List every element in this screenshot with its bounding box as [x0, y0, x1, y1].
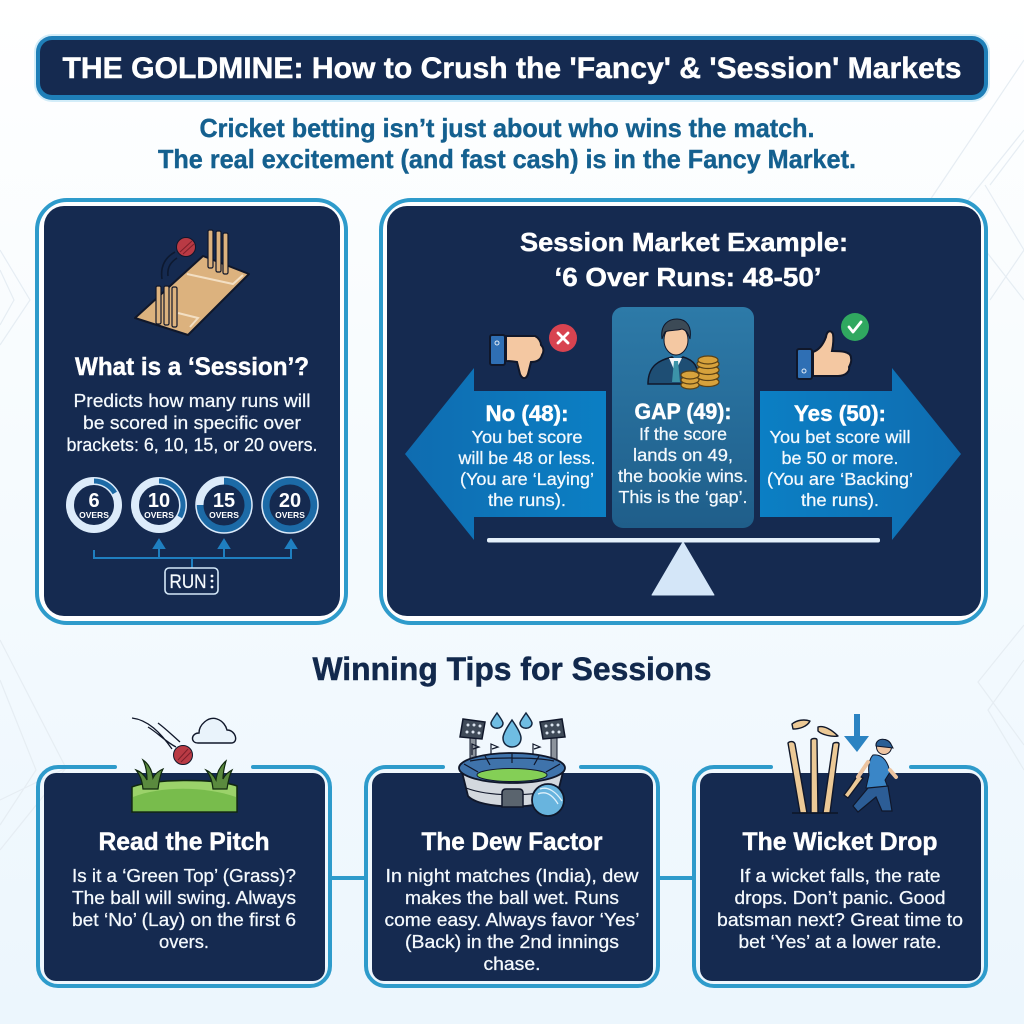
- over brackets rings: 15: [213, 490, 235, 512]
- heading: session market example: Session Market Example:: [520, 227, 848, 257]
- over brackets rings: [70, 477, 318, 533]
- text: gap 49: [618, 399, 748, 507]
- arrow: yes: [760, 368, 961, 540]
- subtitle: Cricket betting isn’t just about who wins the match.: [200, 113, 814, 143]
- over brackets rings: 10: [148, 490, 170, 512]
- heading: the dew factor: The Dew Factor: [422, 828, 603, 856]
- title banner: THE GOLDMINE: How to Crush the 'Fancy' & 'Session' Markets: [62, 52, 962, 85]
- heading: what is a session: What is a ‘Session’?: [75, 353, 309, 381]
- icon: ball on grass with cloud: [132, 718, 237, 812]
- run scoreboard label: [165, 568, 218, 594]
- text: read the pitch body: bet ‘No’ (Lay) on the first 6: [72, 910, 296, 930]
- text: no 48: will be 48 or less.: [457, 448, 596, 468]
- over brackets rings: OVERS: [144, 510, 174, 520]
- panel: session market example: [381, 200, 986, 623]
- subtitle: [158, 113, 856, 174]
- subtitle: The real excitement (and fast cash) is in the Fancy Market.: [158, 144, 856, 174]
- heading: session market example: ‘6 Over Runs: 48-50’: [554, 262, 822, 292]
- icon: broken wicket and batsman: [788, 714, 896, 813]
- over brackets rings: 20: [279, 490, 301, 512]
- heading: read the pitch: Read the Pitch: [98, 828, 270, 856]
- title banner: [34, 34, 990, 102]
- text: no 48: You bet score: [472, 427, 582, 447]
- run scoreboard label: RUN: [170, 572, 206, 593]
- text: the dew factor body: come easy. Always favor ‘Yes’: [384, 910, 640, 930]
- icon: thumbs down: [490, 324, 577, 378]
- balance beam and fulcrum: [487, 538, 880, 595]
- session description: Predicts how many runs will: [74, 390, 310, 411]
- text: gap 49: If the score: [639, 424, 727, 444]
- heading: winning tips: Winning Tips for Sessions: [312, 651, 712, 687]
- text: no 48: the runs).: [488, 490, 566, 510]
- text: the wicket drop body: If a wicket falls, the rate: [740, 866, 940, 886]
- text: no 48: No (48):: [486, 401, 568, 426]
- text: gap 49: This is the ‘gap’.: [618, 487, 748, 507]
- icon: stadium, dew drops and wet ball: [459, 713, 565, 816]
- text: yes 50: [767, 401, 913, 510]
- text: no 48: [457, 401, 596, 510]
- text: gap 49: the bookie wins.: [618, 466, 748, 486]
- gap card: [612, 307, 754, 528]
- icon: bookie with coins: [648, 319, 719, 389]
- text: gap 49: GAP (49):: [634, 399, 732, 424]
- text: yes 50: the runs).: [801, 490, 879, 510]
- text: the wicket drop body: bet ‘Yes’ at a lower rate.: [738, 932, 942, 952]
- icon: cricket pitch with wickets and ball: [135, 230, 249, 335]
- panel: the dew factor: [366, 713, 658, 986]
- over brackets rings: OVERS: [275, 510, 305, 520]
- session description: be scored in specific over: [83, 412, 301, 433]
- panel: the wicket drop: [694, 714, 986, 986]
- text: yes 50: Yes (50):: [794, 401, 886, 426]
- text: the dew factor body: chase.: [484, 954, 540, 974]
- panel: read the pitch: [38, 718, 330, 986]
- text: the dew factor body: [384, 866, 640, 974]
- text: the dew factor body: In night matches (India), dew: [386, 866, 640, 886]
- text: the dew factor body: (Back) in the 2nd innings: [405, 932, 619, 952]
- text: read the pitch body: overs.: [159, 932, 209, 952]
- heading: session market example: [520, 227, 848, 292]
- text: yes 50: You bet score will: [770, 427, 910, 447]
- session description: [66, 390, 318, 455]
- arrows from run box to rings: [94, 540, 296, 568]
- text: read the pitch body: [72, 866, 296, 952]
- text: no 48: (You are ‘Laying’: [460, 469, 594, 489]
- text: the wicket drop body: batsman next? Great time to: [717, 910, 963, 930]
- session description: brackets: 6, 10, 15, or 20 overs.: [66, 434, 318, 455]
- text: read the pitch body: The ball will swing. Always: [72, 888, 296, 908]
- text: yes 50: (You are ‘Backing’: [767, 469, 913, 489]
- icon: thumbs up: [797, 313, 869, 379]
- connectors between tip cards: [332, 876, 692, 880]
- text: the dew factor body: makes the ball wet. Runs: [405, 888, 619, 908]
- text: the wicket drop body: [717, 866, 963, 952]
- over brackets rings: OVERS: [79, 510, 109, 520]
- arrow: no: [405, 368, 606, 540]
- over brackets rings: 6: [88, 490, 100, 512]
- over brackets rings: OVERS: [209, 510, 239, 520]
- text: read the pitch body: Is it a ‘Green Top’ (Grass)?: [72, 866, 296, 886]
- heading: the wicket drop: The Wicket Drop: [742, 828, 938, 856]
- text: yes 50: be 50 or more.: [782, 448, 898, 468]
- panel: what is a session: [37, 200, 346, 623]
- text: the wicket drop body: drops. Don’t panic. Good: [734, 888, 946, 908]
- text: gap 49: lands on 49,: [633, 445, 733, 465]
